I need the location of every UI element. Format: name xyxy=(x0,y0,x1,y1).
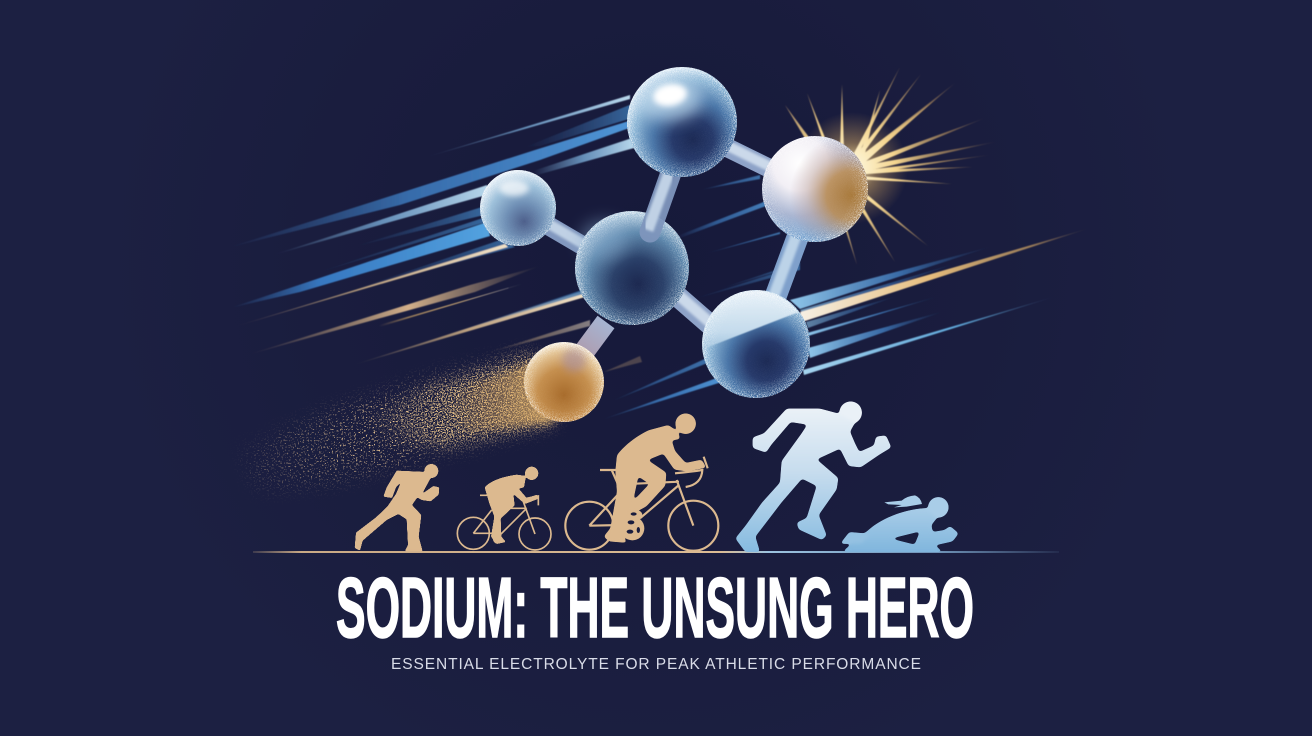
bond: left atom to centre xyxy=(532,214,590,250)
bond: centre to gold atom xyxy=(572,322,606,368)
athlete: pale blue sprinter xyxy=(735,401,891,552)
hair wisp xyxy=(884,495,922,507)
athlete: crouching blue figure xyxy=(840,495,959,552)
subtitle: ESSENTIAL ELECTROLYTE FOR PEAK ATHLETIC PERFORMANCE xyxy=(391,656,921,673)
bond: right atom to lower right xyxy=(770,228,801,306)
atom: right, sunlit xyxy=(762,136,868,242)
right speed streaks xyxy=(601,175,1090,420)
infographic canvas xyxy=(238,67,1076,669)
left speed streaks xyxy=(227,95,634,366)
bond: top to right atom xyxy=(728,146,785,176)
atom: lower right xyxy=(702,290,810,398)
chainring xyxy=(620,510,644,540)
bond: top to centre xyxy=(648,170,672,232)
gold starburst xyxy=(785,67,1000,265)
gold particle trail xyxy=(240,352,555,490)
ground line xyxy=(253,551,1059,553)
molecule xyxy=(480,67,868,422)
athlete: gold runner xyxy=(355,464,439,551)
athlete: large gold cyclist xyxy=(565,413,718,551)
atom: centre xyxy=(575,211,689,325)
athlete: small gold cyclist xyxy=(457,467,551,550)
bond: centre to lower right xyxy=(668,286,722,335)
atom: gold xyxy=(524,342,604,422)
atom: left xyxy=(480,170,556,246)
atom: top xyxy=(627,67,737,177)
